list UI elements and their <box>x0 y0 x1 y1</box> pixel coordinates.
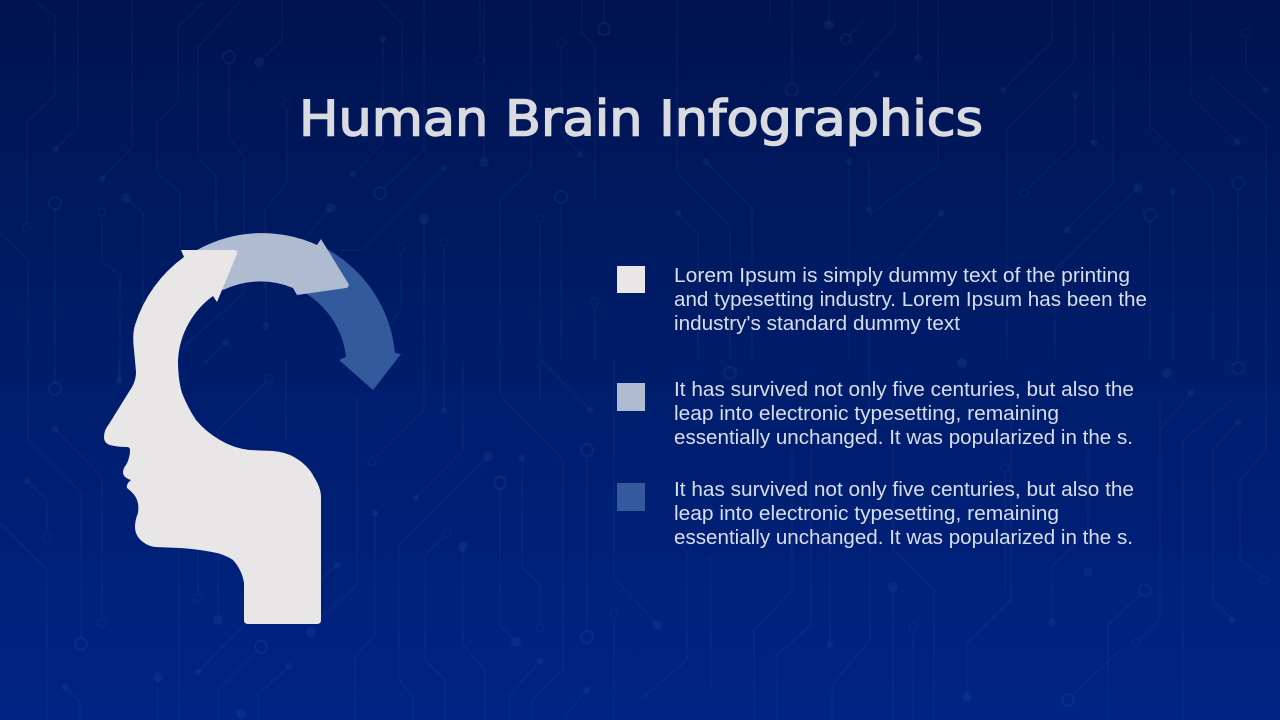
text block 1: industry's standard dummy text <box>674 313 960 335</box>
arrow: dark blue <box>290 248 401 390</box>
swatch 1 <box>617 266 645 293</box>
graphic: head with three arrows <box>104 233 401 624</box>
text block 2: It has survived not only five centuries, but also the <box>674 379 1134 401</box>
swatch 2 <box>617 383 645 411</box>
legend item 2 <box>617 379 1134 449</box>
text block 3: essentially unchanged. It was popularized in the s. <box>674 527 1133 549</box>
text block 3: leap into electronic typesetting, remaining <box>674 503 1059 525</box>
text block 3: It has survived not only five centuries, but also the <box>674 479 1134 501</box>
legend item 3 <box>617 479 1134 549</box>
text block 1: and typesetting industry. Lorem Ipsum has been the <box>674 289 1147 311</box>
text block 1: Lorem Ipsum is simply dummy text of the printing <box>674 265 1130 287</box>
swatch 3 <box>617 483 645 511</box>
text block 2: leap into electronic typesetting, remaining <box>674 403 1059 425</box>
text block 2: essentially unchanged. It was popularized in the s. <box>674 427 1133 449</box>
arrow: light blue <box>197 233 349 295</box>
legend item 1 <box>617 265 1147 335</box>
head silhouette with white arrow <box>104 250 321 624</box>
title: Human Brain Infographics <box>299 90 983 148</box>
